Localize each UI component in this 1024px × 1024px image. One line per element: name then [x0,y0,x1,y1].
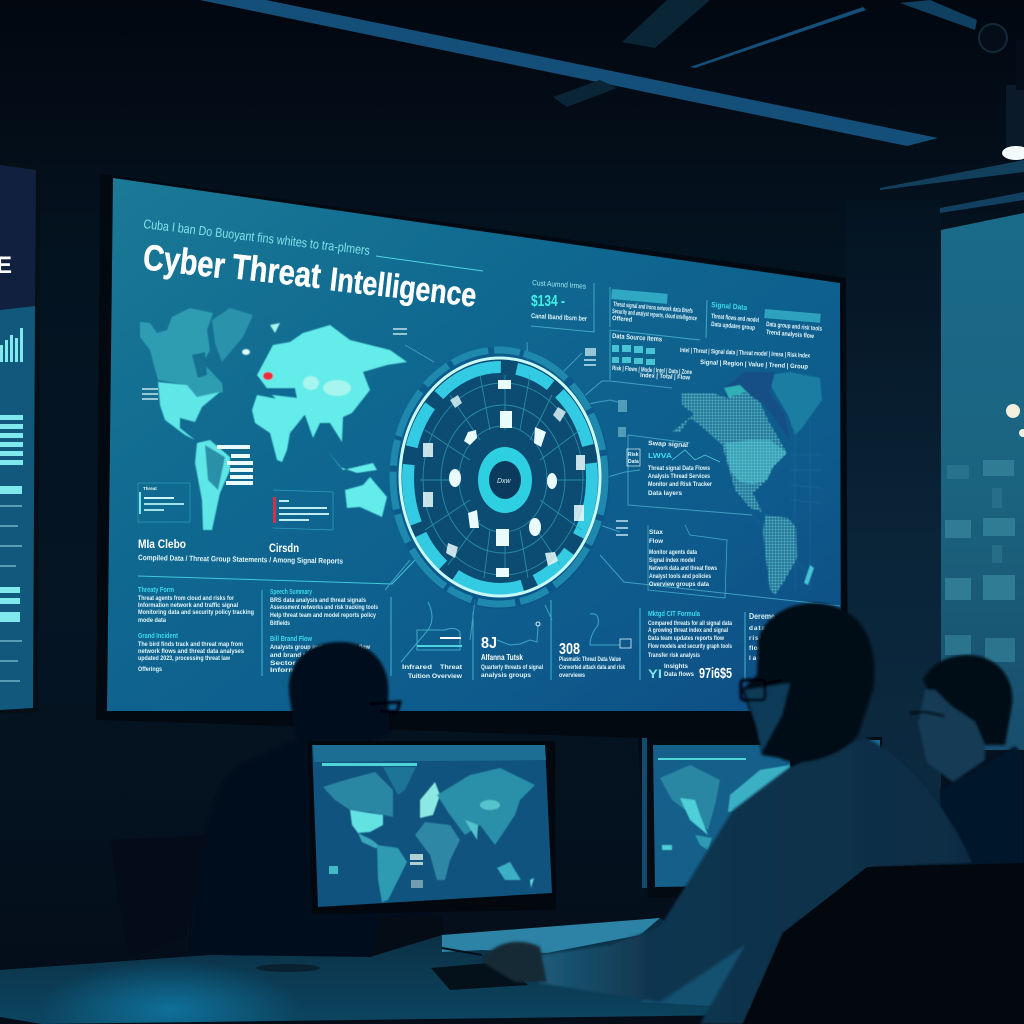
body [940,746,1024,870]
stat block: 8J: analysis groups [481,672,531,679]
stat block: 308: Converted attack data and risk [559,664,625,671]
threat hotspot [263,372,273,380]
info card: top blocks: Offered [612,315,632,324]
info card: right map note one: Monitor and Risk Tracker [648,481,712,488]
stat block: 308: overviews [559,672,585,679]
mediterranean [262,388,297,398]
info card: top blocks: Threat flows and model [711,313,759,324]
main display panel [107,178,841,711]
chart: radial threat wheel [390,347,610,609]
eurasia [257,325,407,442]
monitor side widgets [329,854,423,888]
north america [140,308,223,397]
info card: right map note one: Data layers [648,490,682,497]
data table: Intel | Threat | Signal data | Threat model | Irmsa | Risk Index [680,347,810,360]
greenland [770,372,822,435]
divider [550,600,552,680]
person two [482,603,972,1024]
heading: lower left: Cirsdn [269,541,299,555]
text block: far right: flow [749,645,764,652]
person one silhouette [190,642,440,960]
info card: right map note one: Risk [628,452,639,458]
chart: line sketch one [401,602,463,680]
stat block: 8J: Alfanna Tutsk [481,653,523,662]
text block: formula: Data flows [664,671,694,678]
heading: lower left [138,537,415,584]
text block: column two: Analysts group and monitor data flow [270,644,371,651]
small node labels [142,328,628,536]
stat block: 8J [481,622,543,679]
usa [158,382,220,440]
info card: right map note one: Analysis Thread Services [648,473,710,480]
text block: formula [648,609,732,682]
text block: column one: Grand Incident [138,631,178,640]
south america [195,440,230,530]
info card: top blocks: Data group and risk tools [766,321,822,333]
grid rings [420,375,585,578]
info card: right map note two: Monitor agents data [649,549,697,556]
keyboard and devices [256,948,528,990]
chart: left world map [140,308,407,530]
monitor far right sliver [866,737,882,762]
heading: lower left: MIa Clebo [138,537,186,551]
africa [415,822,460,880]
text block: formula: 97i6$5 [699,665,732,682]
text block: formula: A growing threat index and signal [648,627,728,634]
right map grid [752,420,822,590]
info card: right map note one: Threat signal Data Flows [648,465,710,472]
text block: formula: Flow models and security graph tools [648,643,732,650]
text block: column one: Information network and traffic signal [138,602,238,609]
info card: right map note two: Analyst tools and policies [649,573,711,580]
ceiling beams [200,0,1024,213]
info card: right map note one: Swap signal [648,440,688,449]
south america [377,845,407,902]
text block: column one: Threaty Form [138,585,174,594]
data table: Risk | Flows | Mode | Intel | Data | Zone [612,365,692,376]
text block: column two: Inform list [270,667,311,674]
info card: top blocks: Security and analyst reports, cloud intelligence [612,308,697,322]
dark chair foreground [743,863,1024,1024]
info card: top blocks: Signal Data [711,300,748,312]
head [742,603,874,762]
text block: far right: law [749,655,764,662]
central america [358,833,382,848]
glasses [910,712,945,716]
canada [323,772,393,817]
face [918,690,985,782]
stat block: 8J: 8J [481,635,497,652]
left side screen [0,160,40,714]
info card: right map note two: Signal index model [649,557,695,564]
text block: column two: Assessment networks and risk tracking tools [270,604,378,611]
text block: column one: network flows and threat data analyses [138,648,244,655]
stat block: 308: 308 [559,641,580,658]
small islands [270,323,280,333]
australia [345,477,387,517]
divider [639,608,641,680]
map legend bars [217,445,253,485]
indonesia islands [327,450,377,473]
right monitor map [660,765,790,850]
person three [910,655,1024,870]
info card: top blocks [610,287,822,340]
usa [350,810,383,833]
glasses [741,680,782,700]
text block: column two: Speech Summary [270,587,313,596]
text block: formula: Data team updates reports flow [648,635,725,642]
hudson bay [192,352,207,378]
info card: right map note two: Overview groups data [649,581,709,588]
south america [763,515,797,595]
info card: left map [138,483,190,522]
info card: top blocks: Threat signal and Irona network data Briefs [613,301,693,315]
info card: revenue stat [531,278,594,332]
chart: right world map [672,372,822,595]
chart: line sketch one: Infrared [402,664,432,671]
divider [390,597,392,676]
shirt and arm [539,738,972,1024]
heading: title [141,236,478,314]
text block: formula: Insights [664,663,688,670]
person one glasses [370,702,400,712]
text block: column one: Monitoring data and security policy tracking [138,609,254,616]
central hub [478,447,532,513]
text block: far right [749,612,775,662]
greenland [212,308,253,362]
divider [744,612,746,680]
chart: line sketch one: Tuition Overview [408,673,463,680]
info card: right map note one [627,440,720,497]
asia bright [480,800,500,810]
window on right wall [941,213,1024,750]
spotlight [979,24,1024,160]
data table [610,330,810,382]
divider [472,612,474,680]
hair [923,655,1012,745]
connector lines [385,330,840,640]
greenland [383,767,416,795]
stat block: 308: Plasmatic Threat Data Value [559,656,621,663]
usa highlight [725,440,787,484]
australia [497,862,521,880]
text block: formula: Mktgd CIT Formula [648,609,701,618]
text block: formula: Compared threats for all signal data [648,620,732,627]
text block: column two: Help threat team and model reports policy [270,612,376,619]
heading: title: Threat [230,247,323,296]
table [0,918,750,1024]
info card: right map note two: Stax [649,529,663,536]
stat block: 308 [559,614,631,679]
text block: column two: Sector updates [270,660,330,667]
chart: line sketch one: Threat [440,664,463,671]
screen frame [96,174,848,738]
chart: radial threat wheel: Dxw [497,478,512,485]
wheel disc [400,359,600,597]
info card: right map note one: Data [628,459,639,465]
text block: column two: Bill Brand Flow [270,634,312,643]
info card: top blocks: Data updates group [711,321,755,332]
text block: column one: The bird finds track and threat map from [138,641,243,648]
info card: right map note one: LWVA [648,451,673,460]
cyan ring [408,367,592,589]
heading: lower left: Compiled Data / Threat Group Statements / Among Signal Reports [138,553,343,566]
text block: formula: Transfer risk analysis [648,652,700,659]
chair left [111,835,210,957]
text block: far right: data [749,625,765,632]
text block: column two: and brand trends for risks [270,652,350,659]
info card: top blocks: Trend analysis flow [766,329,815,340]
hand [482,942,547,982]
text block: far right: risk [749,635,763,642]
text block: column one: Threat agents from cloud and risks for [138,595,234,602]
asia highlight [323,380,351,396]
text block: column one [138,585,254,673]
text block: column two: Bitfields [270,620,290,627]
text block: column one: Offerings [138,666,162,673]
text block: column two: BRS data analysis and threat signals [270,597,366,604]
divider [261,590,263,676]
africa [252,395,303,462]
data table: Data Source Items [612,333,662,343]
background lights [1006,404,1024,437]
info card: red marker [273,490,333,530]
data table: Index | Total | Flow [640,372,691,382]
info card: revenue stat: Canal Iband Ibsm ber [531,313,587,323]
monitor center [308,741,556,968]
europe [420,782,440,818]
heading: title: Intelligence [328,260,478,314]
north america [672,392,787,517]
heading: title: Cyber [141,236,227,286]
canadian arctic [724,372,790,440]
wheel icons [423,380,585,577]
info card: revenue stat: $134 - [531,293,565,310]
outer segments [393,350,605,604]
heading: subtitle: Cuba I ban Do Buoyant fins whites to tra-plmers [143,216,371,258]
bright ring [400,358,600,596]
text block: far right: Dereme [749,612,775,621]
text block: column one: updated 2023, processing threat law [138,655,231,662]
info card: right map note two [648,525,727,598]
text block: column one: mode data [138,617,166,624]
text block: formula: YI [648,667,662,681]
monitor map [323,767,535,902]
data table: Signal | Region | Value | Trend | Group [700,359,808,371]
info card: left map: Threat [143,486,157,491]
info card: right map note two: Flow [649,538,664,545]
info card: revenue stat: Cust Aumnd Irmes [532,278,587,291]
wall shading right of screen [846,200,941,820]
asia [437,768,535,845]
stat block: 8J: Quarterly threats of signal [481,664,543,671]
info card: right map note two: Network data and threat flows [649,565,717,572]
text block: column two [270,587,378,674]
face highlight [745,683,790,752]
monitor right [638,738,800,898]
